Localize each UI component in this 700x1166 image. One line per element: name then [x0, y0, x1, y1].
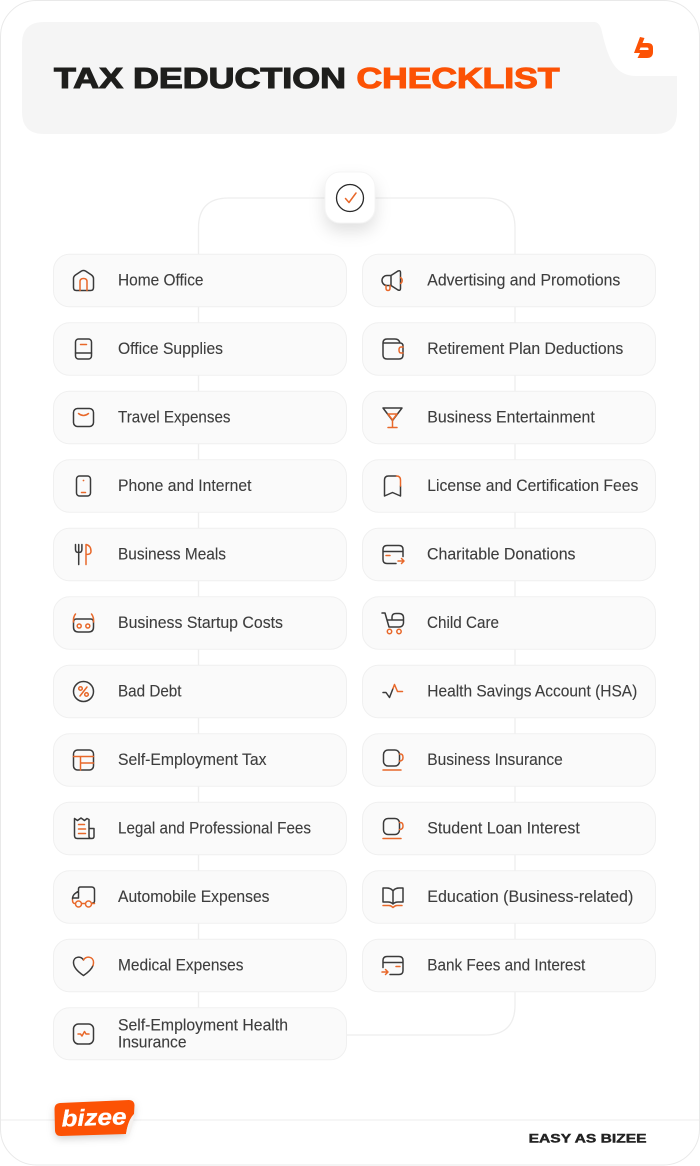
checklist item: Self-Employment Health Insurance: [54, 1008, 346, 1060]
bizee logo sticker: [54, 1100, 134, 1136]
icon: table: [74, 750, 94, 770]
icon: brand mark: [634, 37, 653, 58]
checklist item: Education (Business-related): [362, 871, 656, 923]
icon: card with arrow: [382, 956, 403, 974]
check badge: [325, 172, 375, 223]
icon: pulse line: [383, 684, 402, 698]
checklist item: Bad Debt: [54, 665, 346, 718]
checklist item: Bank Fees and Interest: [362, 939, 656, 992]
icon: notebook: [76, 339, 92, 359]
label: Automobile Expenses: [118, 888, 270, 906]
checklist item: Legal and Professional Fees: [54, 802, 346, 855]
footer rule: [1, 1119, 699, 1121]
checklist item: Home Office: [54, 254, 346, 307]
label: Advertising and Promotions: [427, 272, 620, 290]
checklist item: Phone and Internet: [54, 460, 346, 512]
label: Bank Fees and Interest: [427, 956, 586, 974]
icon: mug: [383, 750, 403, 770]
checklist item: Automobile Expenses: [54, 871, 346, 923]
checklist item: Business Insurance: [362, 734, 656, 786]
label: Student Loan Interest: [427, 820, 580, 838]
label: Retirement Plan Deductions: [427, 340, 623, 358]
label: Health Savings Account (HSA): [427, 682, 637, 700]
bizee logo sticker: bizee: [61, 1103, 127, 1131]
checklist item: Self-Employment Tax: [54, 734, 346, 786]
checklist item: Travel Expenses: [54, 391, 346, 444]
label: Home Office: [118, 272, 204, 290]
icon: percent: [74, 682, 94, 702]
icon: stroller: [382, 613, 404, 634]
label: Business Insurance: [427, 751, 563, 769]
label: Self-Employment Health: [118, 1017, 288, 1035]
icon: truck: [72, 887, 94, 907]
icon: heart: [74, 957, 94, 976]
label: Insurance: [118, 1033, 186, 1051]
icon: cutlery: [76, 544, 91, 564]
label: Education (Business-related): [427, 888, 633, 906]
icon: open book: [383, 888, 403, 908]
checklist item: License and Certification Fees: [362, 460, 656, 512]
label: Office Supplies: [118, 340, 223, 358]
icon: scroll document: [74, 818, 94, 838]
label: Legal and Professional Fees: [118, 820, 311, 838]
label: Self-Employment Tax: [118, 751, 267, 769]
connector lines: [198, 198, 515, 1035]
icon: card with arrow: [383, 546, 404, 564]
checklist item: Business Entertainment: [362, 391, 656, 444]
checklist item: Office Supplies: [54, 323, 346, 375]
icon: bookmark: [384, 476, 400, 496]
icon: wallet: [383, 339, 403, 359]
icon: robot: [73, 614, 94, 632]
label: Business Entertainment: [427, 408, 595, 426]
tagline: EASY AS BIZEE: [529, 1132, 647, 1146]
checklist item: Student Loan Interest: [362, 802, 656, 855]
checklist item: Business Startup Costs: [54, 597, 346, 649]
title: TAX DEDUCTION: [54, 63, 346, 95]
checklist item: Business Meals: [54, 528, 346, 581]
icon: health monitor: [74, 1024, 94, 1044]
label: Child Care: [427, 614, 499, 632]
icon: cocktail glass: [383, 408, 402, 428]
checklist item: Retirement Plan Deductions: [362, 323, 656, 375]
label: License and Certification Fees: [427, 477, 638, 495]
label: Bad Debt: [118, 682, 182, 700]
icon: mug: [383, 818, 403, 838]
label: Business Startup Costs: [118, 614, 283, 632]
checklist item: Health Savings Account (HSA): [362, 665, 656, 718]
icon: phone: [76, 476, 90, 496]
checklist item: Advertising and Promotions: [362, 254, 656, 307]
header panel: [22, 22, 677, 134]
icon: megaphone: [382, 271, 402, 290]
checklist item: Medical Expenses: [54, 939, 346, 992]
label: Medical Expenses: [118, 956, 244, 974]
icon: house: [74, 270, 94, 290]
label: Phone and Internet: [118, 477, 252, 495]
label: Business Meals: [118, 546, 226, 564]
checklist item: Child Care: [362, 597, 656, 649]
label: Travel Expenses: [118, 408, 230, 426]
label: Charitable Donations: [427, 546, 576, 564]
icon: envelope: [74, 408, 94, 426]
checklist item: Charitable Donations: [362, 528, 656, 581]
title: CHECKLIST: [356, 63, 560, 95]
